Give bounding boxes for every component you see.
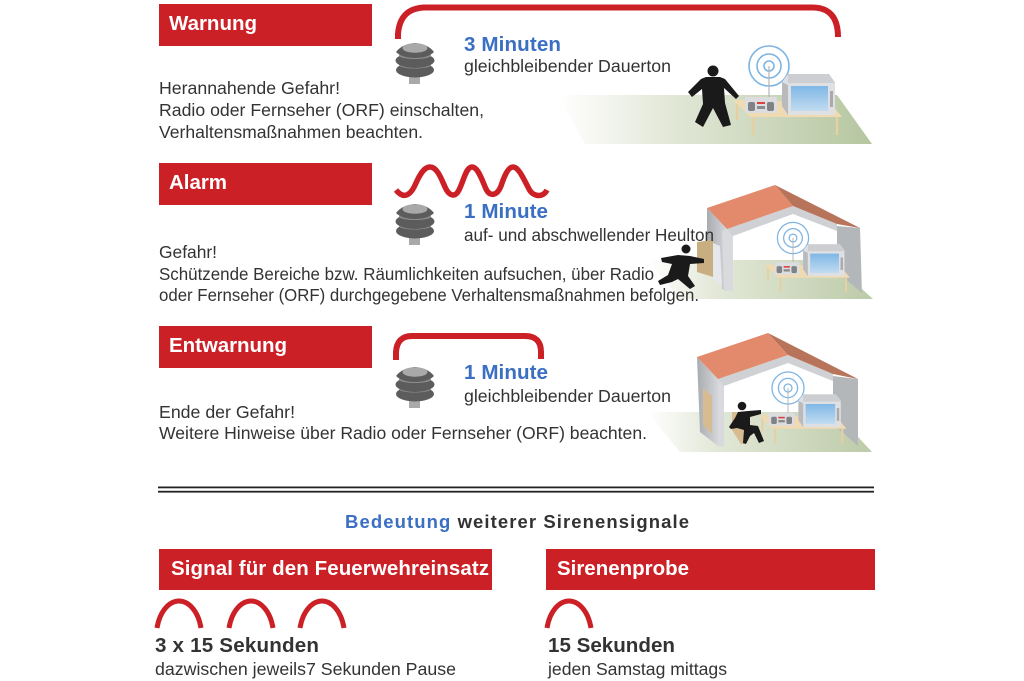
signal curve: rising and falling tone <box>396 167 547 196</box>
duration: 1 Minute: 1 Minute <box>464 361 548 384</box>
illustration: person running into house <box>648 185 873 299</box>
heading: Entwarnung <box>159 326 372 368</box>
note: dazwischen jeweils7 Sekunden Pause <box>155 659 456 679</box>
note: jeden Samstag mittags <box>547 659 727 679</box>
tone description: auf- und abschwellender Heulton <box>464 225 714 245</box>
heading <box>159 549 492 590</box>
duration: 3 Minuten: 3 Minuten <box>464 33 561 56</box>
description text <box>159 242 699 305</box>
description text: Gefahr! <box>159 242 217 262</box>
description text: Schützende Bereiche bzw. Räumlichkeiten aufsuchen, über Radio <box>159 264 654 284</box>
signal curve: one burst <box>547 601 591 628</box>
duration: 15 Sekunden <box>548 634 675 657</box>
heading: Alarm: Alarm <box>169 171 227 194</box>
panel: Alarm <box>159 163 873 305</box>
panel: Sirenenprobe <box>546 549 875 679</box>
tone description: gleichbleibender Dauerton <box>464 56 671 76</box>
heading: Warnung: Warnung <box>169 12 257 35</box>
icon: siren <box>396 367 434 408</box>
heading: Alarm <box>159 163 372 205</box>
icon: siren <box>396 43 434 84</box>
duration: 3 x 15 Sekunden <box>155 634 319 657</box>
signal curve: continuous tone <box>398 8 838 39</box>
heading: Warnung <box>159 4 372 46</box>
illustration: person at radio and TV <box>558 46 872 144</box>
heading: Signal für den Feuerwehreinsatz <box>171 557 489 580</box>
tone description: gleichbleibender Dauerton <box>464 386 671 406</box>
section heading: Bedeutung weiterer Sirenensignale <box>345 511 689 532</box>
heading: Sirenenprobe <box>557 557 689 580</box>
description text: Herannahende Gefahr! <box>159 78 340 98</box>
description text <box>159 402 647 443</box>
panel: Signal für den Feuerwehreinsatz <box>155 549 492 679</box>
signal curve: continuous tone <box>396 336 541 360</box>
icon: siren <box>396 204 434 245</box>
description text: oder Fernseher (ORF) durchgegebene Verhaltensmaßnahmen befolgen. <box>159 285 699 305</box>
panel: Warnung <box>159 4 872 144</box>
description text: Verhaltensmaßnahmen beachten. <box>159 122 423 142</box>
heading <box>546 549 875 590</box>
panel: Entwarnung <box>159 326 872 452</box>
illustration: person seated in house <box>647 333 872 452</box>
description text: Weitere Hinweise über Radio oder Fernseher (ORF) beachten. <box>159 423 647 443</box>
divider <box>158 486 874 493</box>
description text: Ende der Gefahr! <box>159 402 295 422</box>
signal curves: three bursts <box>157 601 344 628</box>
description text: Radio oder Fernseher (ORF) einschalten, <box>159 100 484 120</box>
duration: 1 Minute: 1 Minute <box>464 200 548 223</box>
description text <box>159 78 484 142</box>
heading: Entwarnung: Entwarnung <box>169 334 287 357</box>
